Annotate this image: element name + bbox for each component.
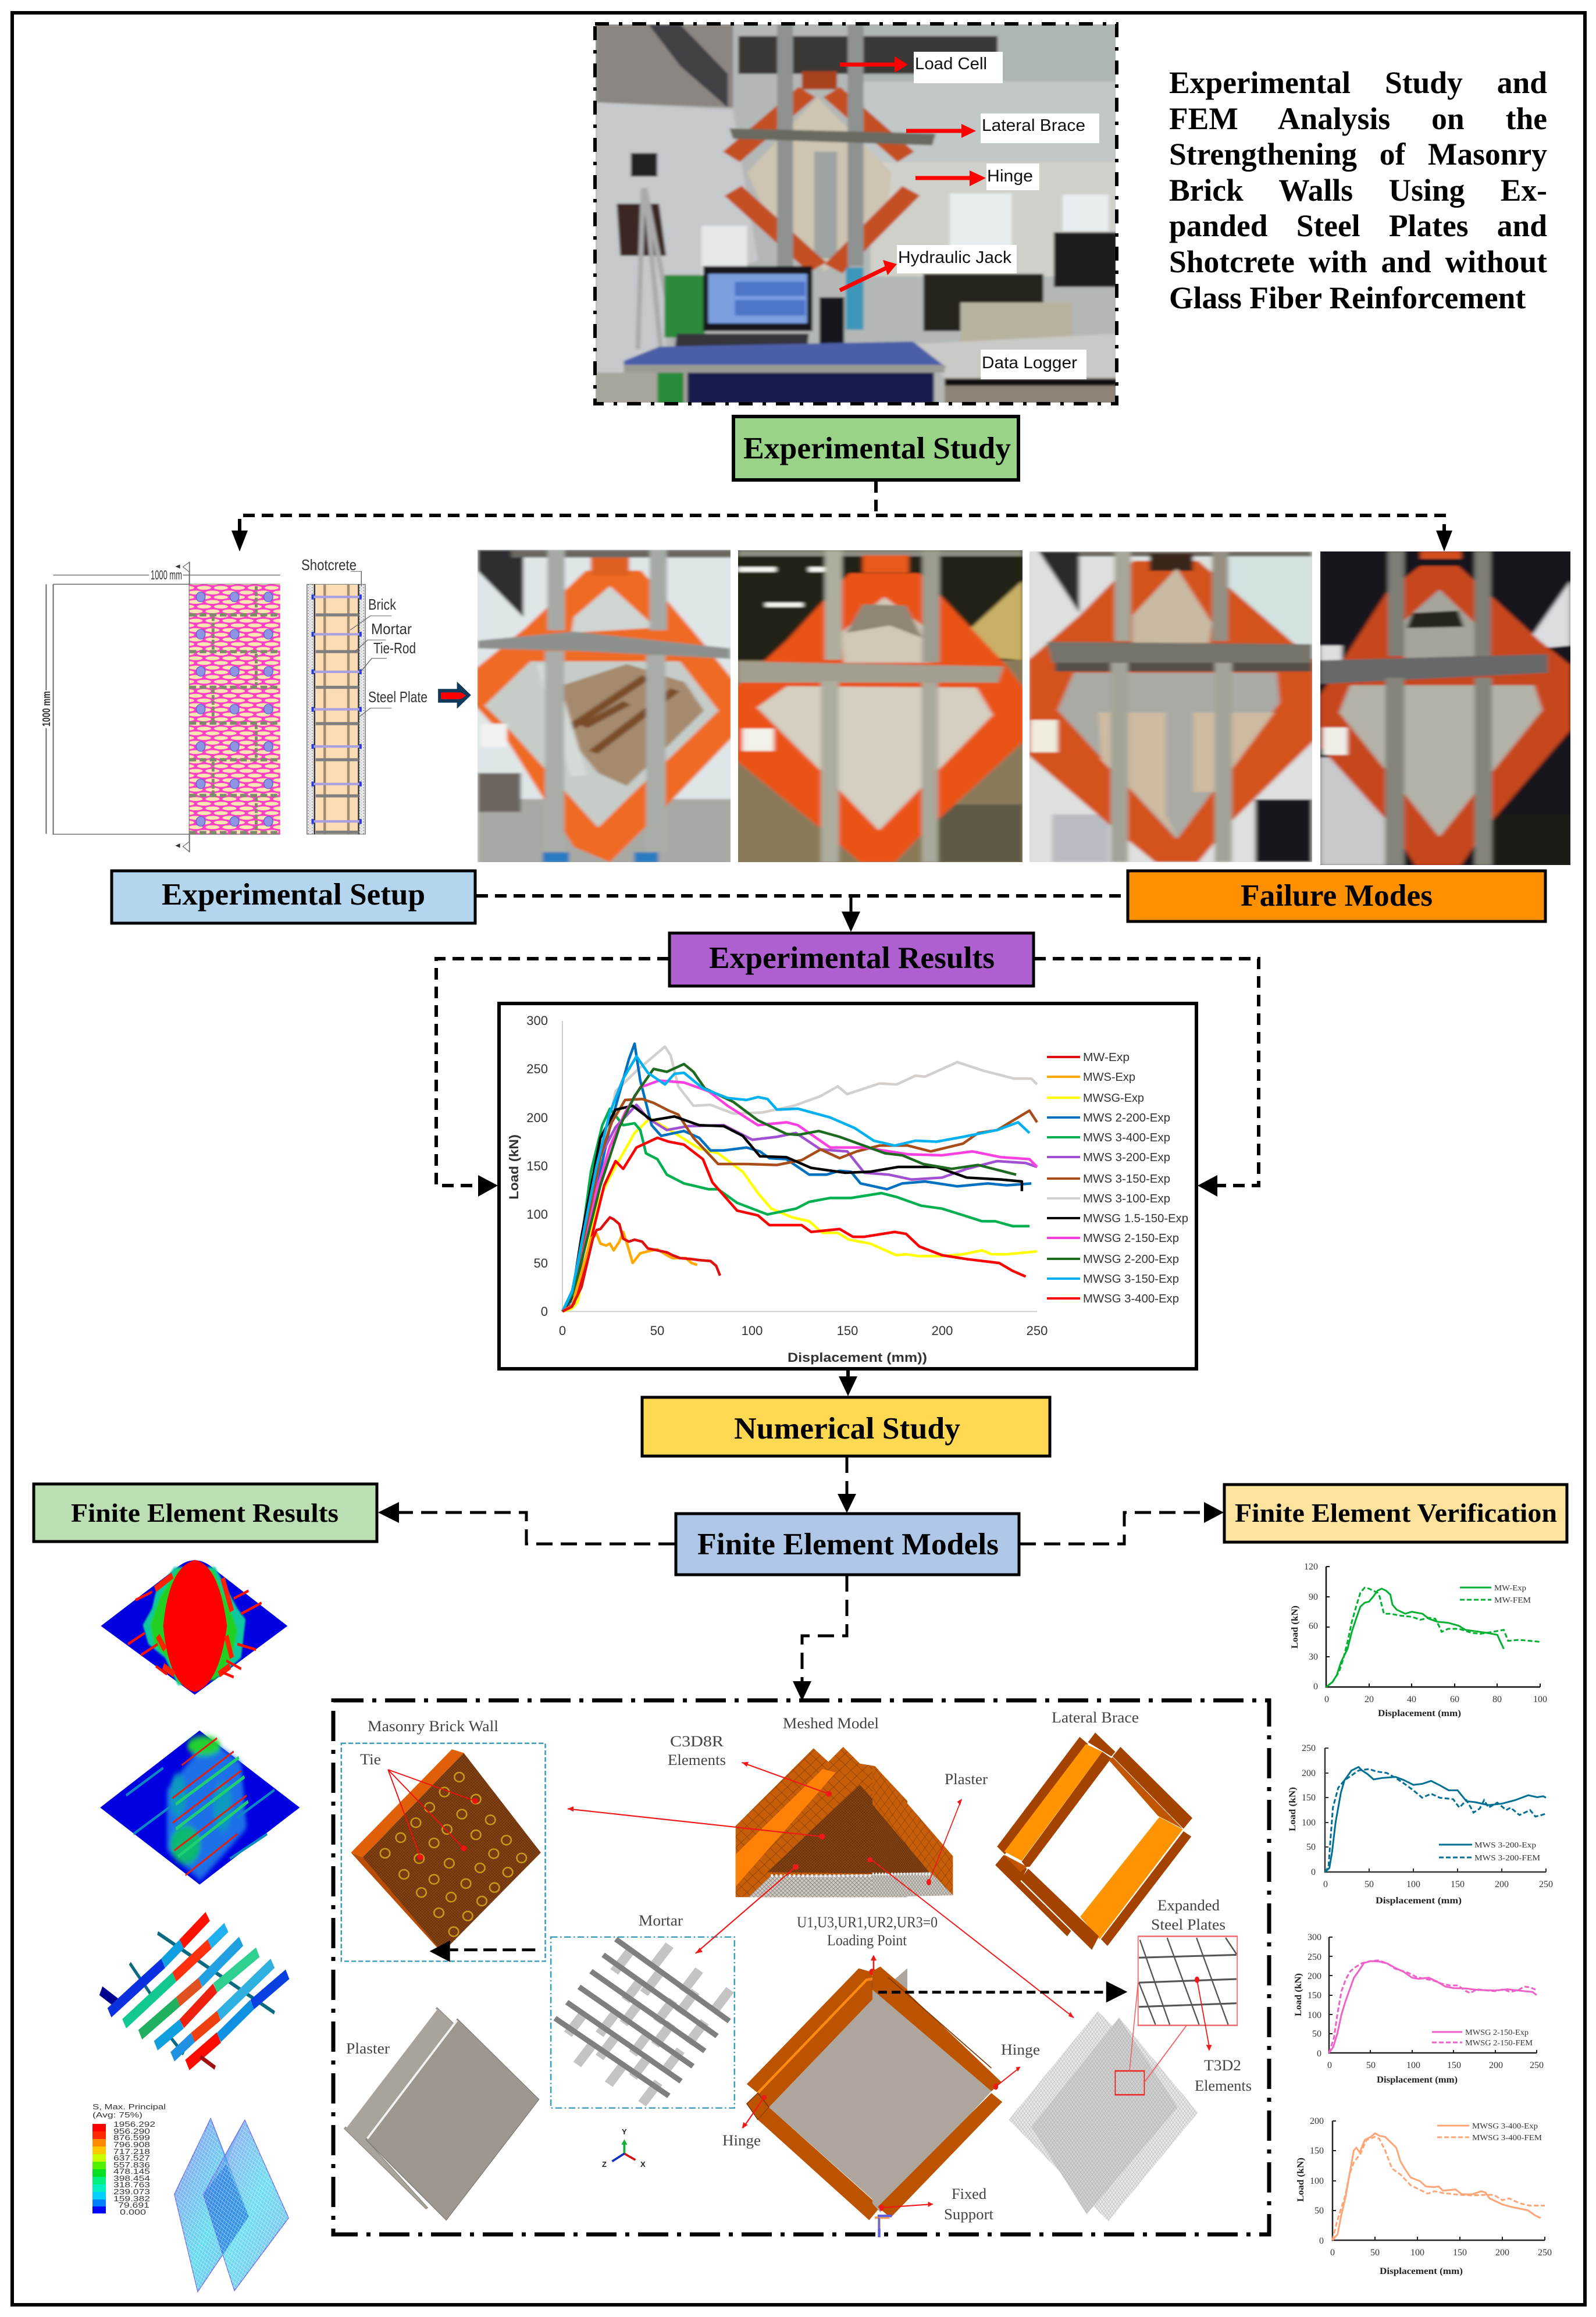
- chart: MWSG 2-150 verification: 100: [1406, 2060, 1420, 2070]
- chart legend: MWSG 2-150-Exp: [1083, 1232, 1179, 1245]
- y axis tick labels: 200: [526, 1111, 548, 1125]
- box: Numerical Study: [642, 1397, 1050, 1456]
- diagram: wall elevation and section: [41, 556, 471, 852]
- chart: MWSG 3-400 verification: 150: [1453, 2248, 1467, 2258]
- model labels: Fixed: [952, 2186, 986, 2202]
- chart: MWSG 2-150 verification: 150: [1447, 2060, 1461, 2070]
- chart: MWS 3-200 verification: 100: [1302, 1818, 1316, 1828]
- box: Failure Modes: Failure Modes: [1241, 879, 1433, 913]
- chart: MWSG 2-150 verification: 0: [1327, 2060, 1332, 2070]
- chart legend: MWSG-Exp: [1083, 1092, 1144, 1105]
- chart legend: MWS 3-150-Exp: [1083, 1173, 1170, 1186]
- chart: MWSG 3-400 verification: 100: [1410, 2248, 1424, 2258]
- chart: MW verification: MW-Exp: [1494, 1584, 1526, 1593]
- model labels: Elements: [668, 1752, 726, 1768]
- chart: MWSG 2-150 verification: MWSG 2-150-Exp: [1465, 2028, 1529, 2037]
- heading: infographic title: Shotcrete with and without: [1169, 244, 1547, 279]
- connector: FE models to model panel: [793, 1575, 847, 1701]
- chart: MWSG 3-400 verification: 100: [1310, 2176, 1324, 2186]
- heading: infographic title: Brick Walls Using Ex-: [1169, 173, 1547, 208]
- contour legend: 318.763: [113, 2180, 150, 2189]
- contour legend: 79.691: [118, 2201, 149, 2209]
- photo: test setup with labelled components: [582, 12, 1146, 427]
- contour legend: 159.382: [113, 2194, 150, 2203]
- contour legend: 876.599: [113, 2133, 150, 2142]
- model labels: Hinge: [722, 2132, 761, 2149]
- contour legend: 956.290: [113, 2127, 150, 2136]
- chart: MW verification: 60: [1309, 1621, 1318, 1631]
- model labels: Steel Plates: [1151, 1916, 1226, 1933]
- heading: infographic title: FEM Analysis on the: [1169, 101, 1547, 136]
- contour legend: 0.000: [120, 2208, 146, 2216]
- chart legend: MWS 3-100-Exp: [1083, 1193, 1170, 1205]
- contour legend: 717.218: [113, 2147, 150, 2156]
- chart legend: MWS-Exp: [1083, 1071, 1135, 1084]
- chart: MWSG 3-400 verification: Load (kN): [1296, 2158, 1306, 2202]
- chart legend: MWS 3-400-Exp: [1083, 1131, 1170, 1144]
- y axis tick labels: 100: [526, 1207, 548, 1222]
- chart: MWS 3-200 verification: 250: [1302, 1743, 1316, 1753]
- contour legend: 478.145: [113, 2167, 150, 2176]
- chart: MW verification: Displacement (mm): [1378, 1709, 1461, 1718]
- box: Failure Modes: [1128, 871, 1545, 921]
- model labels: Plaster: [945, 1771, 988, 1788]
- labels: wall drawing: Shotcrete: [301, 556, 357, 574]
- model labels: Meshed Model: [783, 1715, 879, 1732]
- chart: MW verification: 100: [1533, 1695, 1547, 1704]
- model labels: Loading Point: [827, 1932, 907, 1949]
- chart: MW verification: 0: [1313, 1682, 1318, 1692]
- x axis tick labels: [559, 1323, 1048, 1338]
- chart: MWS 3-200 verification: Displacement (mm): [1376, 1896, 1462, 1906]
- heading: infographic title: panded Steel Plates and: [1169, 208, 1547, 243]
- chart: MW verification: 30: [1309, 1652, 1318, 1662]
- contour legend: 557.836: [113, 2161, 150, 2169]
- chart: MWS 3-200 verification: 100: [1406, 1880, 1420, 1889]
- x axis tick labels: 50: [650, 1323, 664, 1338]
- model labels: Y: [622, 2127, 627, 2136]
- chart: MWSG 2-150 verification: 250: [1530, 2060, 1544, 2070]
- panel outline: [333, 1700, 1269, 2234]
- chart legend: MWSG 2-200-Exp: [1083, 1253, 1179, 1266]
- y axis tick labels: [526, 1013, 548, 1319]
- x axis tick labels: 200: [932, 1323, 953, 1338]
- y axis tick labels: 50: [534, 1256, 548, 1270]
- labels: wall drawing: [41, 556, 428, 727]
- labels: wall drawing: Steel Plate: [368, 688, 428, 706]
- chart legend: MWS 2-200-Exp: [1083, 1112, 1170, 1124]
- chart: MWSG 3-400 verification: 250: [1538, 2248, 1552, 2258]
- contour legend: 796.908: [113, 2140, 150, 2149]
- chart: MW verification: 40: [1407, 1695, 1416, 1704]
- labels: wall drawing: Brick: [368, 596, 397, 613]
- labels: wall drawing: 1000 mm: [151, 568, 182, 582]
- axis titles: [507, 1134, 927, 1365]
- chart legend: MWSG 3-400-Exp: [1083, 1293, 1179, 1305]
- box: Experimental Study: Experimental Study: [743, 432, 1011, 465]
- model parts: wall, plaster, mortar, meshed model, frame: [341, 1743, 907, 2237]
- connector: Experimental Study to branches: [231, 481, 1452, 551]
- connector: results to chart: [436, 959, 1259, 1197]
- chart: MWS 3-200 verification: 0: [1323, 1880, 1328, 1889]
- box: Finite Element Results: Finite Element Results: [71, 1499, 339, 1528]
- heading: infographic title: Glass Fiber Reinforcement: [1169, 280, 1526, 315]
- box: Experimental Results: Experimental Results: [709, 941, 995, 975]
- chart: load vs displacement experimental curves: [499, 1003, 1196, 1369]
- labels: wall drawing: Mortar: [371, 620, 412, 638]
- box: Finite Element Models: [676, 1514, 1019, 1575]
- chart: MWS 3-200 verification: MWS 3-200-FEM: [1474, 1854, 1541, 1863]
- chart: MWSG 3-400 verification: [1296, 2116, 1552, 2276]
- chart: MWS 3-200 verification: 250: [1539, 1880, 1553, 1889]
- y axis tick labels: 0: [541, 1304, 548, 1319]
- chart: MWSG 2-150 verification: [1294, 1932, 1544, 2085]
- chart: MWSG 2-150 verification: Load (kN): [1294, 1973, 1303, 2016]
- chart legend: MWSG 3-150-Exp: [1083, 1273, 1179, 1286]
- contour legend: S, Max. Principal: [92, 2102, 166, 2111]
- x axis tick labels: 100: [742, 1323, 763, 1338]
- chart: MWSG 2-150 verification: 50: [1366, 2060, 1376, 2070]
- axis titles: Load (kN): [507, 1134, 521, 1200]
- chart legend: [1047, 1051, 1188, 1305]
- photo: failure mode 1: [478, 550, 731, 862]
- labels on photo: Hydraulic Jack: [898, 248, 1012, 267]
- chart: MW verification: MW-FEM: [1494, 1596, 1531, 1605]
- chart: MWSG 2-150 verification: 250: [1308, 1952, 1321, 1962]
- model labels: Expanded: [1157, 1897, 1220, 1914]
- chart: MW verification: 80: [1492, 1695, 1502, 1704]
- chart: MWSG 3-400 verification: Displacement (mm): [1380, 2266, 1463, 2276]
- chart: MWS 3-200 verification: 50: [1306, 1842, 1316, 1852]
- model parts: right side: [872, 1732, 1238, 2229]
- chart: MWSG 3-400 verification: 200: [1310, 2116, 1324, 2126]
- model labels: Tie: [360, 1751, 381, 1768]
- box: Finite Element Models: Finite Element Models: [697, 1528, 999, 1561]
- model labels: Mortar: [639, 1912, 683, 1929]
- chart: MWS 3-200 verification: 200: [1302, 1768, 1316, 1778]
- model labels: X: [640, 2160, 646, 2169]
- chart: MWSG 2-150 verification: 200: [1489, 2060, 1503, 2070]
- chart: MWSG 3-400 verification: MWSG 3-400-FEM: [1472, 2134, 1542, 2142]
- contour legend: (Avg: 75%): [92, 2110, 142, 2119]
- chart legend: MWSG 1.5-150-Exp: [1083, 1212, 1188, 1225]
- chart: MWSG 2-150 verification: MWSG 2-150-FEM: [1465, 2039, 1533, 2048]
- arrow: numerical study to FE models: [838, 1457, 856, 1513]
- model labels: Elements: [1195, 2077, 1252, 2094]
- photo: failure mode 4: [1320, 551, 1570, 865]
- chart: MWSG 3-400 verification: 0: [1319, 2236, 1324, 2246]
- model labels: Masonry Brick Wall: [368, 1718, 498, 1735]
- chart: MWS 3-200 verification: 50: [1365, 1880, 1374, 1889]
- chart: MWSG 2-150 verification: 300: [1308, 1932, 1321, 1942]
- contour legend: 398.454: [113, 2174, 150, 2183]
- model labels: Hinge: [1001, 2041, 1040, 2058]
- contour legend: 637.527: [113, 2154, 150, 2162]
- box: Finite Element Verification: Finite Element Verification: [1235, 1499, 1557, 1528]
- box: Experimental Study: [733, 417, 1018, 480]
- chart: MWS 3-200 verification: 200: [1495, 1880, 1509, 1889]
- labels on photo: Hinge: [987, 167, 1033, 186]
- labels on photo: Lateral Brace: [982, 116, 1085, 135]
- x axis tick labels: 150: [837, 1323, 858, 1338]
- chart: MWSG 2-150 verification: 150: [1308, 1991, 1321, 2001]
- y axis tick labels: 300: [526, 1013, 548, 1028]
- labels: wall drawing: Tie-Rod: [373, 639, 416, 657]
- chart: MWS 3-200 verification: Load (kN): [1288, 1787, 1298, 1831]
- chart: MWS 3-200 verification: MWS 3-200-Exp: [1474, 1841, 1536, 1850]
- chart legend: MWS 3-200-Exp: [1083, 1151, 1170, 1164]
- chart: MWSG 2-150 verification: 0: [1317, 2049, 1321, 2059]
- heading: infographic title: [1169, 65, 1547, 315]
- box: Finite Element Results: [34, 1484, 377, 1542]
- connector: setup and failure modes to results: [476, 896, 1126, 932]
- chart: MW verification: 120: [1304, 1562, 1318, 1572]
- chart: MWSG 2-150 verification: Displacement (mm): [1377, 2075, 1458, 2085]
- model labels: Support: [944, 2206, 994, 2223]
- curves: [562, 1044, 1037, 1311]
- chart: MWSG 3-400 verification: 0: [1330, 2248, 1335, 2258]
- labels on photo: [840, 52, 1099, 379]
- contour legend: 1956.292: [113, 2120, 155, 2129]
- chart: MW verification: [1290, 1562, 1547, 1718]
- chart: MW verification: 0: [1324, 1695, 1329, 1704]
- labels: wall drawing: 1000 mm: [41, 691, 52, 727]
- connector: FE models to results and verification: [378, 1502, 1224, 1544]
- model labels: C3D8R: [670, 1733, 724, 1750]
- chart: MWS 3-200 verification: 150: [1451, 1880, 1465, 1889]
- chart: MWSG 3-400 verification: 150: [1310, 2146, 1324, 2156]
- box: Finite Element Verification: [1224, 1485, 1567, 1542]
- chart: MWSG 3-400 verification: 50: [1370, 2248, 1380, 2258]
- x axis tick labels: 0: [559, 1323, 566, 1338]
- chart: MWSG 3-400 verification: 50: [1314, 2206, 1324, 2216]
- heading: infographic title: Strengthening of Masonry: [1169, 137, 1547, 172]
- labels on photo: Load Cell: [915, 55, 987, 73]
- model labels: T3D2: [1204, 2057, 1241, 2074]
- panel: finite element results contours: [92, 1560, 300, 2291]
- chart: MWSG 2-150 verification: 100: [1308, 2010, 1321, 2020]
- chart: MW verification: Load (kN): [1290, 1606, 1300, 1649]
- box: Experimental Setup: [112, 871, 475, 923]
- chart: MW verification: 90: [1309, 1592, 1318, 1602]
- x axis tick labels: 250: [1027, 1323, 1048, 1338]
- chart: MWSG 3-400 verification: MWSG 3-400-Exp: [1472, 2122, 1538, 2131]
- box: Experimental Setup: Experimental Setup: [162, 878, 425, 912]
- contour legend: [92, 2102, 166, 2216]
- y axis tick labels: 150: [526, 1159, 548, 1173]
- axis titles: Displacement (mm)): [788, 1350, 927, 1365]
- photo: failure mode 2: [738, 550, 1023, 862]
- chart: MW verification: 60: [1450, 1695, 1459, 1704]
- arrow: chart to numerical study: [839, 1369, 857, 1396]
- labels on photo: Data Logger: [982, 354, 1077, 372]
- chart: MW verification: 20: [1365, 1695, 1374, 1704]
- model labels: Plaster: [346, 2040, 390, 2057]
- box: Numerical Study: Numerical Study: [734, 1412, 960, 1446]
- chart: MWSG 2-150 verification: 50: [1312, 2029, 1321, 2039]
- model labels: [346, 1709, 1252, 2223]
- chart: MWS 3-200 verification: 150: [1302, 1793, 1316, 1803]
- chart: MWSG 3-400 verification: 200: [1495, 2248, 1509, 2258]
- panel: finite element model parts: [333, 1700, 1269, 2237]
- box: Experimental Results: [669, 933, 1034, 986]
- y axis tick labels: 250: [526, 1062, 548, 1076]
- photo border: [595, 24, 1117, 404]
- model labels: U1,U3,UR1,UR2,UR3=0: [797, 1914, 938, 1931]
- chart: MWS 3-200 verification: [1288, 1743, 1553, 1906]
- model labels: Z: [602, 2160, 607, 2169]
- chart: MWSG 2-150 verification: 200: [1308, 1971, 1321, 1981]
- model labels: Lateral Brace: [1052, 1709, 1139, 1726]
- chart: MWS 3-200 verification: 0: [1311, 1867, 1316, 1877]
- photo: failure mode 3: [1029, 551, 1312, 862]
- contour legend: 239.073: [113, 2187, 150, 2196]
- heading: infographic title: Experimental Study and: [1169, 65, 1547, 100]
- chart legend: MW-Exp: [1083, 1051, 1130, 1064]
